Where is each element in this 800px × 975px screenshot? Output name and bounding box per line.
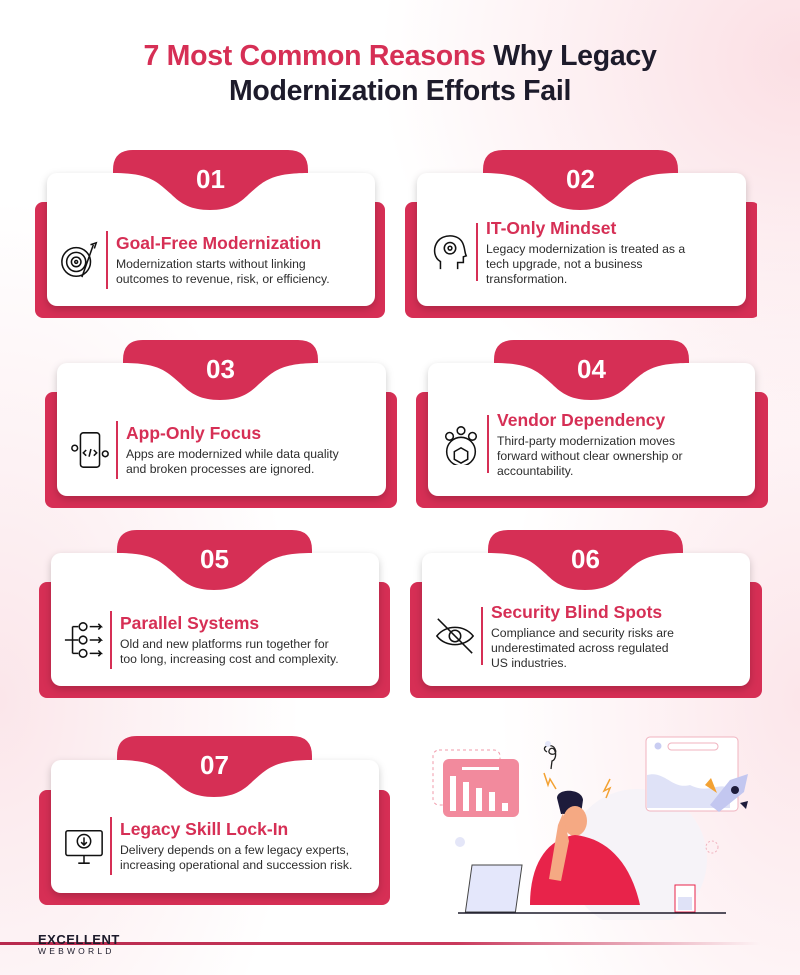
card 03: 03 [206, 354, 235, 384]
card 02: IT-Only Mindset [486, 218, 616, 238]
card 04 [416, 340, 768, 508]
card 06: US industries. [491, 656, 567, 670]
icon: monitor lock [65, 830, 103, 864]
card 06: Compliance and security risks are [491, 626, 674, 640]
card 07: Legacy Skill Lock-In [120, 819, 288, 839]
card 02: 02 [566, 164, 595, 194]
card 03: Apps are modernized while data quality [126, 447, 339, 461]
logo [38, 932, 120, 956]
card 02: Legacy modernization is treated as a [486, 242, 685, 256]
card 05: Old and new platforms run together for [120, 637, 329, 651]
card 04: Vendor Dependency [497, 410, 665, 430]
card 04: 04 [577, 354, 606, 384]
card 04: forward without clear ownership or [497, 448, 683, 462]
title [143, 40, 657, 107]
text: Modernization starts without linking [116, 257, 306, 271]
icon: mobile code [71, 432, 109, 468]
icon: target [61, 242, 98, 278]
icon: parallel systems [64, 622, 103, 658]
icon: vendor network [445, 426, 477, 465]
card 06: Security Blind Spots [491, 602, 662, 622]
card 02: tech upgrade, not a business [486, 256, 643, 270]
card 03 [45, 340, 397, 508]
card 05: 05 [200, 544, 229, 574]
card 02 [405, 150, 757, 318]
card 03: and broken processes are ignored. [126, 462, 314, 476]
card 06: 06 [571, 544, 600, 574]
illustration: stressed worker [432, 736, 748, 920]
card 06: underestimated across regulated [491, 640, 668, 654]
card 01 [35, 150, 385, 318]
card 03: App-Only Focus [126, 423, 261, 443]
card 02: transformation. [486, 272, 567, 286]
card 05: too long, increasing cost and complexity. [120, 652, 339, 666]
footer divider [0, 942, 760, 945]
icon: eye blind [436, 618, 474, 654]
text: outcomes to revenue, risk, or efficiency. [116, 272, 330, 286]
logo: WEBWORLD [38, 946, 115, 956]
card 05 [39, 530, 390, 698]
card 04: accountability. [497, 464, 573, 478]
card 07: increasing operational and succession risk. [120, 858, 352, 872]
card 04: Third-party modernization moves [497, 434, 675, 448]
card 06 [410, 530, 762, 698]
logo: EXCELLENT [38, 932, 120, 947]
title: 7 Most Common Reasons Why Legacy [143, 40, 656, 72]
title: Modernization Efforts Fail [229, 75, 571, 107]
card 07 [39, 736, 390, 905]
text [116, 233, 330, 286]
icon: head gear [434, 235, 468, 270]
text: Goal-Free Modernization [116, 233, 321, 253]
card 07: 07 [200, 750, 229, 780]
card 05: Parallel Systems [120, 613, 259, 633]
card 07: Delivery depends on a few legacy experts, [120, 843, 349, 857]
card 01: 01 [196, 164, 225, 194]
